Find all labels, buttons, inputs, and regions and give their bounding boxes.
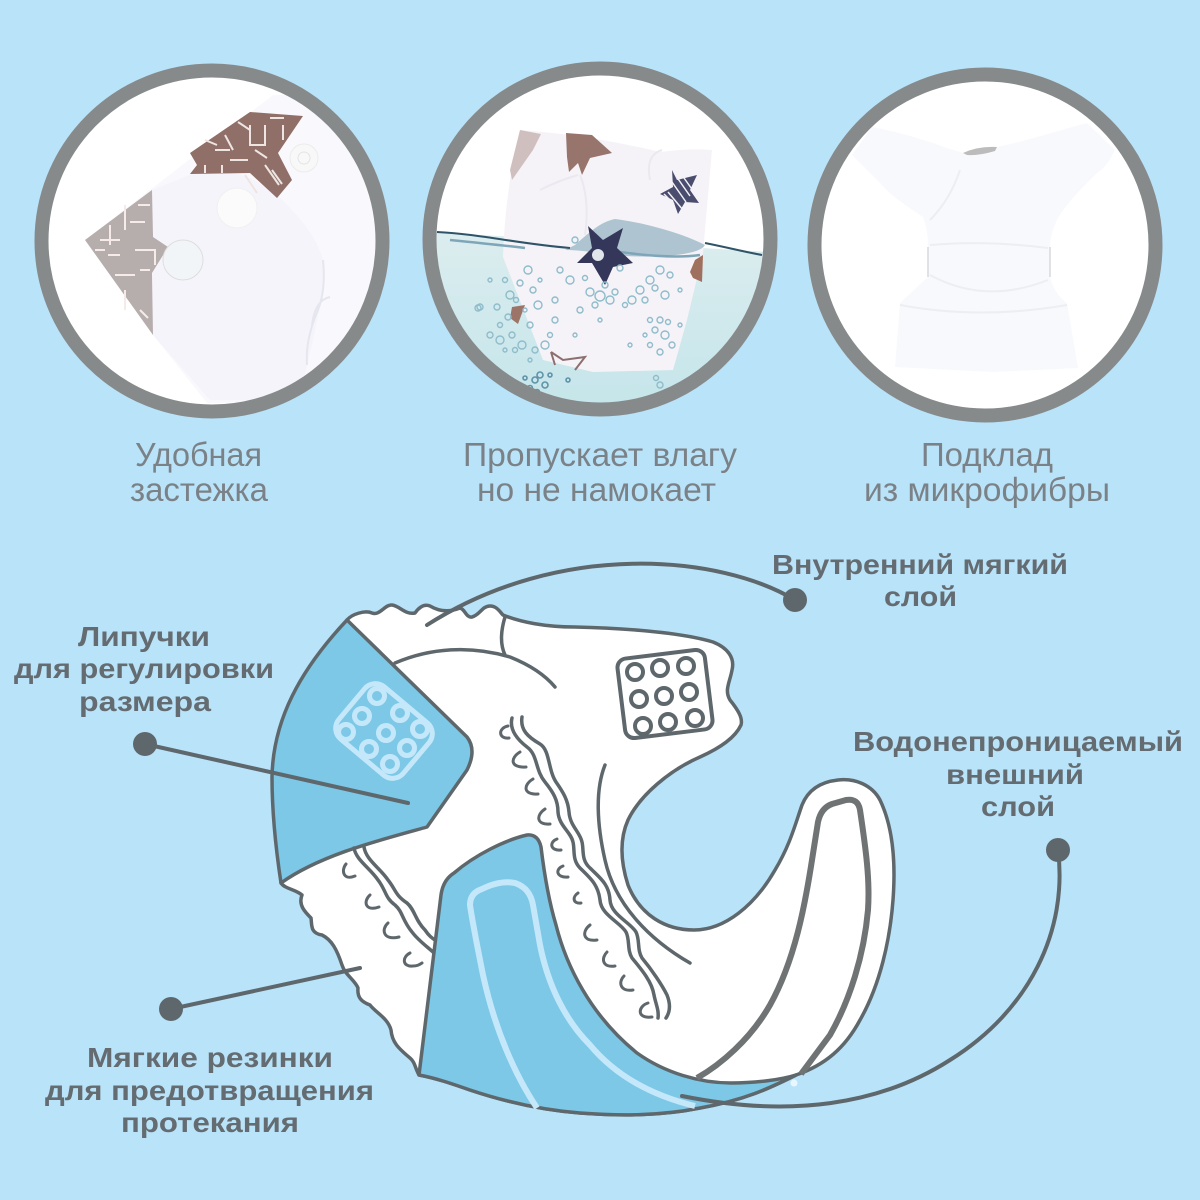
star prints bbox=[510, 130, 541, 180]
photo circle: microfiber lining bbox=[814, 74, 1156, 416]
label: inner soft layer: слой bbox=[884, 581, 957, 612]
label: velcro: размера bbox=[79, 686, 211, 717]
label: soft elastics: протекания bbox=[121, 1107, 299, 1138]
label: inner soft layer bbox=[772, 549, 1068, 612]
label: velcro bbox=[14, 621, 274, 717]
leader: velcro bbox=[133, 732, 408, 803]
dot bbox=[159, 997, 183, 1021]
caption: fastener bbox=[130, 436, 269, 508]
caption: moisture bbox=[463, 436, 738, 508]
label: inner soft layer: Внутренний мягкий bbox=[772, 549, 1068, 580]
leader: elastic bbox=[159, 968, 360, 1021]
white liner bbox=[852, 123, 1115, 372]
ruffled elastic lower bbox=[343, 847, 435, 966]
ruffled elastic upper bbox=[501, 717, 670, 1018]
label: waterproof outer layer: Водонепроницаемый bbox=[853, 726, 1183, 757]
label: soft elastics bbox=[45, 1042, 374, 1138]
dot bbox=[133, 732, 157, 756]
leader: waterproof layer bbox=[682, 838, 1070, 1106]
caption: lining bbox=[864, 436, 1110, 508]
label: soft elastics: Мягкие резинки bbox=[87, 1042, 333, 1073]
flap snap panel bbox=[330, 678, 438, 784]
label: velcro: Липучки bbox=[78, 621, 210, 652]
navy star bbox=[577, 226, 633, 285]
grey star print bbox=[85, 190, 168, 335]
caption: fastener: застежка bbox=[130, 471, 269, 508]
caption: lining: Подклад bbox=[921, 436, 1053, 473]
brown star print bbox=[190, 112, 303, 198]
label: waterproof outer layer bbox=[853, 726, 1183, 822]
diaper fabric bbox=[85, 95, 380, 403]
photo circle: diaper in water bbox=[430, 68, 770, 410]
air bubbles bbox=[475, 237, 682, 394]
water surface bbox=[565, 219, 705, 257]
diaper illustration bbox=[272, 605, 894, 1115]
snap buttons bbox=[217, 188, 257, 228]
thick inner gusset bbox=[697, 800, 869, 1078]
caption: fastener: Удобная bbox=[135, 436, 262, 473]
leg inner arc bbox=[598, 765, 690, 963]
waistband seams bbox=[395, 617, 555, 687]
small highlight bbox=[790, 1080, 798, 1086]
water bbox=[430, 232, 770, 410]
dot bbox=[1046, 838, 1070, 862]
label: soft elastics: для предотвращения bbox=[45, 1075, 374, 1106]
leader: inner soft layer bbox=[427, 564, 807, 625]
blue side flap bbox=[272, 620, 472, 883]
label: waterproof outer layer: слой bbox=[981, 791, 1055, 822]
photo circle: snap fastener close-up bbox=[42, 70, 382, 412]
diaper body bbox=[281, 605, 894, 1115]
caption: moisture: но не намокает bbox=[477, 471, 716, 508]
blue front pad bbox=[419, 835, 796, 1115]
label: velcro: для регулировки bbox=[14, 653, 274, 684]
pad light stripe bbox=[470, 882, 695, 1108]
diaper bbox=[503, 130, 712, 372]
striped star bbox=[660, 170, 699, 214]
right snap panel bbox=[616, 649, 714, 739]
caption: lining: из микрофибры bbox=[864, 471, 1110, 508]
caption: moisture: Пропускает влагу bbox=[463, 436, 738, 473]
label: waterproof outer layer: внешний bbox=[946, 759, 1084, 790]
dot bbox=[783, 588, 807, 612]
